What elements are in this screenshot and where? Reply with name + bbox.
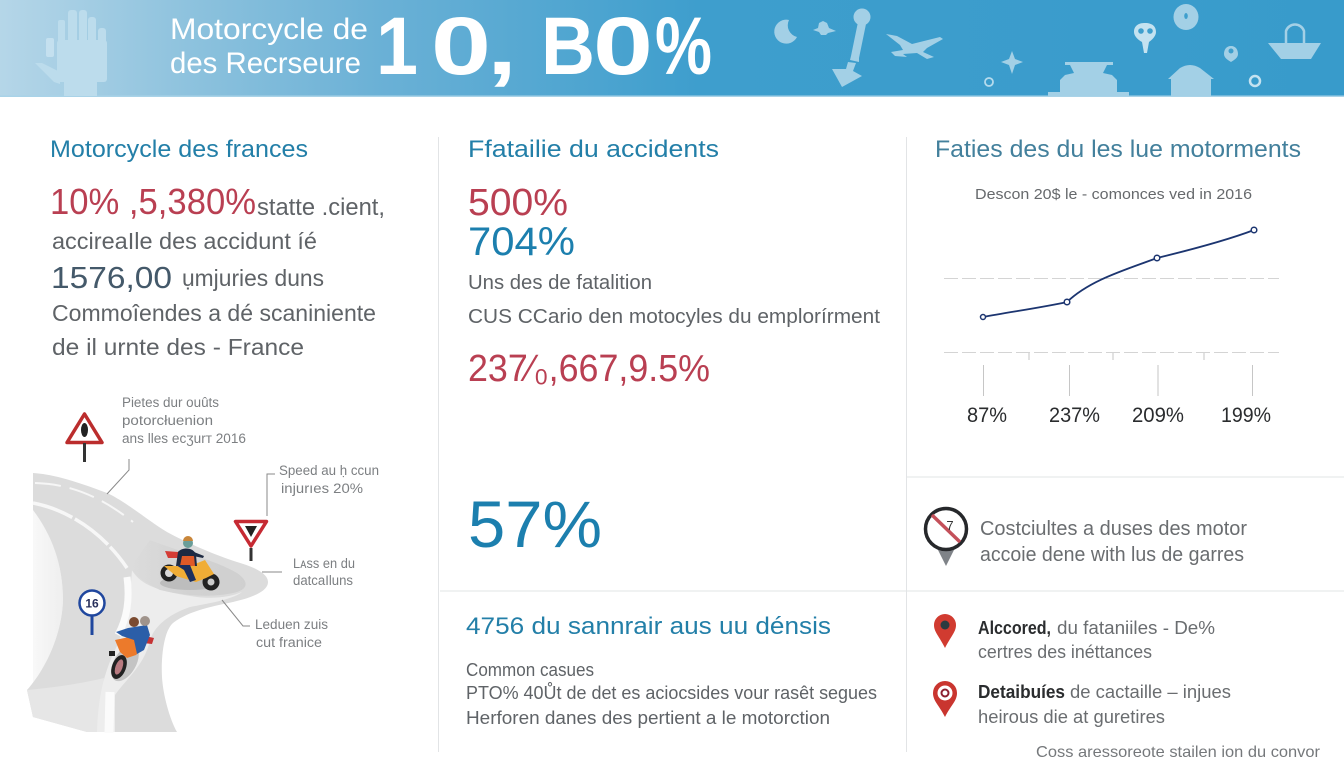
stat: 500%: 500%: [468, 182, 568, 224]
shaded lane under bike: [130, 540, 246, 596]
list item two: heirous die at guretires: [978, 707, 1165, 727]
common causes text: [466, 660, 877, 728]
icon: blue round sign: [80, 590, 104, 635]
heading: trend: Faties des du les lue motorments: [935, 136, 1301, 163]
callout: right: Lᴀss en du: [293, 556, 355, 571]
icon: yield sign: [236, 522, 266, 561]
road markings: [35, 483, 133, 522]
fatalities text: [468, 272, 880, 328]
icon: motorcycle rider one: [160, 536, 220, 590]
callout: bottom: [222, 600, 328, 650]
header title: [170, 13, 368, 80]
road surface: [27, 473, 268, 732]
callout: speed: [267, 463, 379, 516]
chart subtitle: Descon 20$ le - comonces ved in 2016: [975, 186, 1252, 203]
list item one: certres des inéttances: [978, 642, 1152, 662]
key figures text: ụmjuries duns: [182, 265, 324, 291]
key figures text: Commoîendes a dé scaniniente: [52, 300, 376, 326]
icon: warning sign: [67, 414, 102, 462]
callout: right: [262, 556, 355, 588]
list item one: Alccored,: [978, 618, 1051, 638]
header big number: ,: [487, 1, 517, 92]
callout: speed: injurıes 20%: [281, 481, 363, 496]
panel: middle column: [466, 136, 880, 728]
header icons: [774, 4, 1321, 96]
key figures text: accireaIle des accidunt íé: [52, 228, 317, 254]
header title: Motorcycle de: [170, 13, 368, 46]
header big number: 0: [593, 1, 653, 92]
subheading: 4756: 4756 du sannrair aus uu dénsis: [466, 613, 831, 640]
fatalities text: CUS CCario den motocyles du emplorírment: [468, 306, 880, 328]
header big number: B: [541, 1, 595, 92]
header big number: [376, 1, 712, 92]
list item one: du fataniiles - De%: [1057, 618, 1215, 638]
heading: accidents: Ffatailie du accidents: [468, 136, 719, 163]
key figures text: 10% ,5,380%: [50, 181, 256, 222]
key figures text: de il urnte des - France: [52, 334, 304, 360]
list item one: [978, 618, 1215, 662]
footer note: Coss aressoreote stailen ion du convor: [1036, 744, 1321, 761]
list item two: Detaibuíes: [978, 682, 1065, 702]
callout: bottom: Leduen zuis: [255, 617, 328, 632]
callout: top left: Pietes dur ouûts: [122, 395, 219, 410]
callout: bottom: cut franice: [256, 635, 322, 650]
header banner: [0, 0, 1344, 97]
callout: top left: ans lles ecʒurт 2016: [122, 431, 246, 446]
heading: motorcycle: Motorcycle des frances: [50, 136, 308, 163]
axis labels: 87%: [967, 404, 1007, 427]
icon: red pin two: [933, 681, 957, 717]
axis labels: 209%: [1132, 404, 1184, 427]
lighter lane: [97, 570, 242, 732]
trend line: [983, 230, 1254, 317]
stat: 704%: 704%: [468, 220, 575, 264]
stat: red multi-number: 237⁄₀,667,9.5%: [468, 348, 710, 390]
note text: Costciultes a duses des motor: [980, 518, 1247, 540]
key figures text: 1576,00: [51, 260, 172, 295]
data points: [980, 227, 1257, 320]
header big number: 1: [376, 1, 418, 92]
faded road edge: [27, 505, 63, 717]
key figures text: [50, 181, 385, 360]
icon: blue round sign: 16: [85, 596, 99, 610]
callout: top left: [107, 395, 246, 494]
icon: no-sign pin: [926, 508, 966, 566]
common causes text: Common casues: [466, 660, 594, 680]
header big number: 0: [431, 1, 491, 92]
header big number: %: [655, 1, 712, 92]
note text: [980, 518, 1247, 566]
panel: left column: [27, 136, 385, 733]
icon: no-sign pin: 7: [946, 518, 954, 533]
icon: motorcycle rider two: [105, 616, 154, 686]
icon: hand: [35, 10, 107, 96]
bottom-left lighter ground: [27, 678, 104, 732]
key figures text: statte .cient,: [257, 194, 385, 221]
axis labels: 199%: [1221, 404, 1271, 427]
list item two: [978, 682, 1231, 727]
axis labels: 237%: [1049, 404, 1100, 427]
road illustration: [27, 395, 379, 733]
panel: right column: [926, 136, 1321, 761]
callout: top left: potorcłuenion: [122, 413, 213, 428]
callout: right: datcaIluns: [293, 573, 353, 588]
common causes text: PTO% 40Ůt de det es aciocsides vour rasêt segues: [466, 682, 877, 703]
callout: speed: Speed au ḥ ccun: [279, 463, 379, 478]
list item two: de cactaille – injues: [1070, 682, 1231, 702]
axis labels: [967, 404, 1271, 427]
note text: accoie dene with lus de garres: [980, 544, 1244, 566]
fatalities text: Uns des de fatalition: [468, 272, 652, 294]
common causes text: Herforen danes des pertient a le motorction: [466, 708, 830, 728]
line chart: [944, 186, 1279, 427]
header title: des Recrseure: [170, 47, 361, 80]
stat: 57%: 57%: [468, 487, 602, 561]
icon: red pin one: [934, 614, 956, 648]
